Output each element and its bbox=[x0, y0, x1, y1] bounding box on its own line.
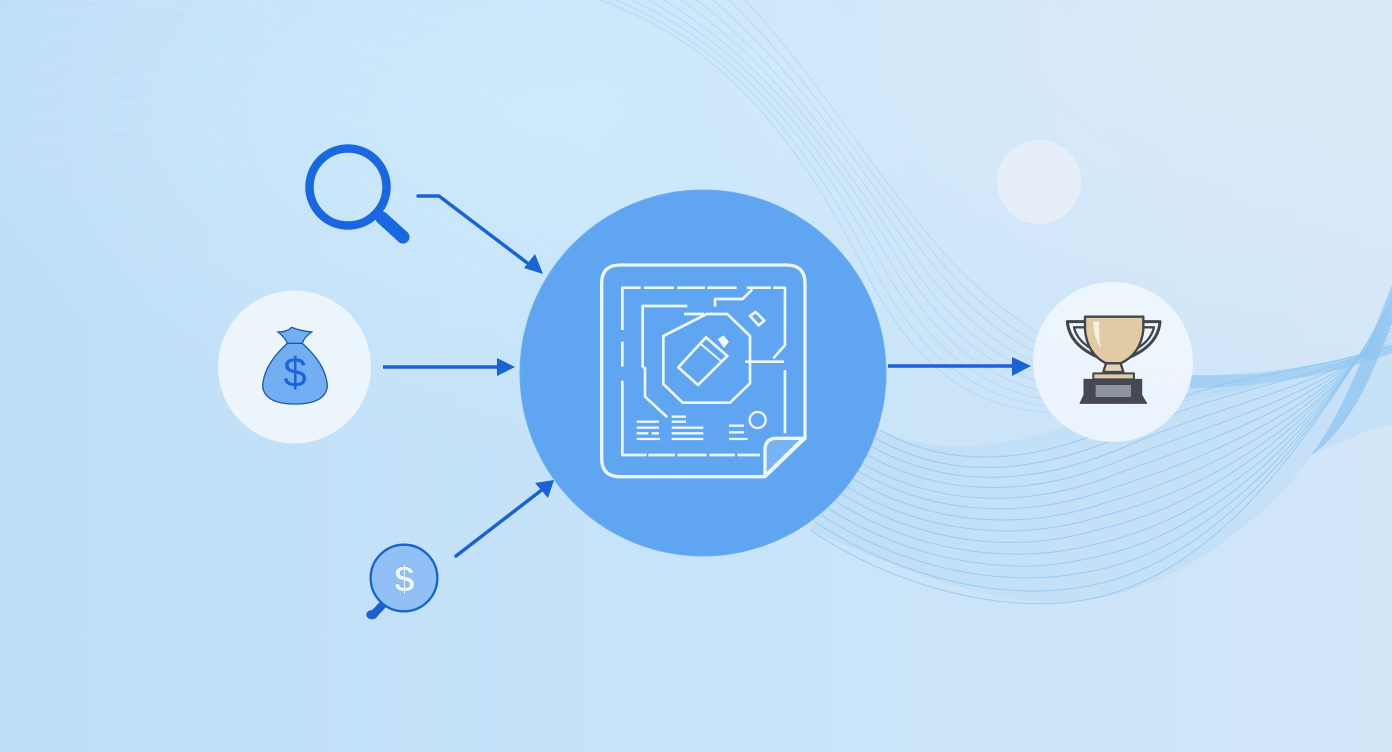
inner wall plan bbox=[643, 306, 687, 417]
round marker bbox=[750, 412, 766, 428]
base cap bbox=[1093, 373, 1134, 379]
small room marker bbox=[750, 312, 764, 325]
note lines left bbox=[637, 422, 660, 439]
outer wall plan bbox=[622, 288, 785, 455]
icon: dollar magnifier bbox=[366, 545, 437, 619]
icon: dollar magnifier: $ bbox=[394, 558, 415, 600]
stem bbox=[1103, 363, 1123, 372]
cup highlight bbox=[1093, 322, 1101, 348]
wave lines: upper family bbox=[600, 0, 1392, 413]
page fold bbox=[765, 438, 803, 476]
arrow: dollar to centre bbox=[456, 480, 554, 556]
icon: blueprint document bbox=[602, 265, 805, 477]
octagon room bbox=[663, 314, 750, 403]
icon: magnifying glass bbox=[310, 148, 403, 237]
handles bbox=[1067, 322, 1160, 357]
arrow: money to centre bbox=[383, 358, 515, 376]
icon: money bag: $ bbox=[283, 349, 307, 396]
trophy circle bbox=[1033, 282, 1193, 442]
note lines right bbox=[729, 426, 748, 439]
wave lines: lower family bbox=[810, 300, 1392, 604]
note lines middle bbox=[672, 417, 703, 439]
base bbox=[1080, 379, 1147, 403]
upper corridor bbox=[715, 289, 752, 307]
wave ribbon fill bbox=[810, 285, 1392, 602]
arrow: centre to trophy bbox=[888, 357, 1031, 376]
connector bbox=[745, 358, 784, 366]
icon: money bag bbox=[263, 327, 327, 404]
money bag circle bbox=[218, 290, 371, 444]
icon: trophy bbox=[1067, 317, 1160, 403]
central bottle icon bbox=[678, 337, 727, 385]
document outline bbox=[602, 265, 805, 477]
arrow: search to centre bbox=[418, 196, 543, 274]
central circle bbox=[520, 190, 886, 556]
decorative faint arcs top left bbox=[0, 0, 890, 540]
pale decorative circle bbox=[997, 140, 1081, 224]
cup bbox=[1085, 317, 1143, 363]
plaque bbox=[1096, 385, 1131, 397]
